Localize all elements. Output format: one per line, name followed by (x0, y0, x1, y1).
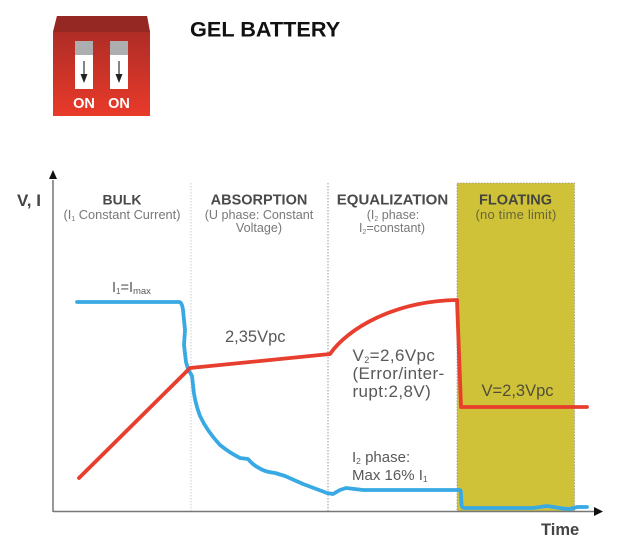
label: I1 = Imax: 1 (116, 287, 121, 296)
panel: equalization heading: 2 (362, 229, 366, 236)
label: I1 = Imax: =I (120, 280, 133, 296)
panel: bulk heading: BULK (103, 192, 141, 208)
label: I2 phase: Max 16% I (352, 467, 423, 484)
panel: equalization heading: =constant) (366, 221, 425, 235)
panel: floating heading: (no time limit) (475, 207, 557, 222)
label: I2 phase (352, 449, 428, 484)
panel: bulk heading: Constant Current) (75, 207, 180, 222)
panel: floating heading (475, 192, 557, 222)
label: I2 phase: phase: (361, 449, 410, 466)
x axis with arrow (53, 507, 603, 516)
panel: equalization heading: EQUALIZATION (337, 192, 448, 208)
panel: absorption heading: ABSORPTION (211, 192, 307, 208)
icon: DIP switches ON ON (53, 16, 150, 116)
y axis with arrow (49, 170, 57, 512)
phase divider: absorption to equalization (327, 183, 329, 511)
current curve (blue) (77, 302, 587, 509)
label: V2 voltage (352, 346, 445, 401)
label: V2 voltage: =2,6Vpc (370, 346, 435, 365)
y axis label: V, I (17, 191, 41, 210)
panel: bulk heading (64, 192, 180, 223)
x axis label: Time (541, 521, 579, 539)
title: GEL BATTERY (190, 16, 341, 42)
label: I2 phase: 1 (423, 474, 428, 484)
label: I2 phase: 2 (356, 456, 361, 466)
panel: equalization heading (337, 192, 448, 236)
label: V=2,3Vpc: V=2,3Vpc (482, 382, 554, 400)
panel: bulk heading: (I (64, 207, 71, 222)
icon: DIP switches ON ON: ON (73, 96, 95, 112)
label: V2 voltage: V (352, 346, 364, 365)
panel: absorption heading: Voltage) (236, 221, 282, 235)
label: I1 = Imax: max (133, 286, 151, 297)
panel: equalization heading: (I (367, 208, 374, 222)
label: V2 voltage: rupt:2,8V) (352, 382, 431, 401)
label: V2 voltage: (Error/inter- (352, 364, 445, 383)
label: I2 phase: I (352, 449, 356, 466)
panel: absorption heading: (U phase: Constant (205, 208, 314, 222)
label: 2,35Vpc: 2,35Vpc (225, 328, 286, 346)
label: I1 = Imax: I (112, 280, 116, 296)
panel: equalization heading: phase: (378, 208, 419, 222)
panel: absorption heading (205, 192, 314, 235)
phase divider: bulk to absorption (190, 183, 192, 511)
panel: floating heading: FLOATING (479, 192, 552, 208)
panel: equalization heading: 2 (374, 216, 378, 223)
panel: equalization heading: I (359, 221, 362, 235)
label: V2 voltage: 2 (364, 355, 370, 365)
panel: floating phase background (457, 183, 574, 511)
icon: DIP switches ON ON: ON (108, 96, 130, 112)
panel: bulk heading: 1 (71, 216, 75, 223)
voltage curve (red) (79, 300, 587, 478)
